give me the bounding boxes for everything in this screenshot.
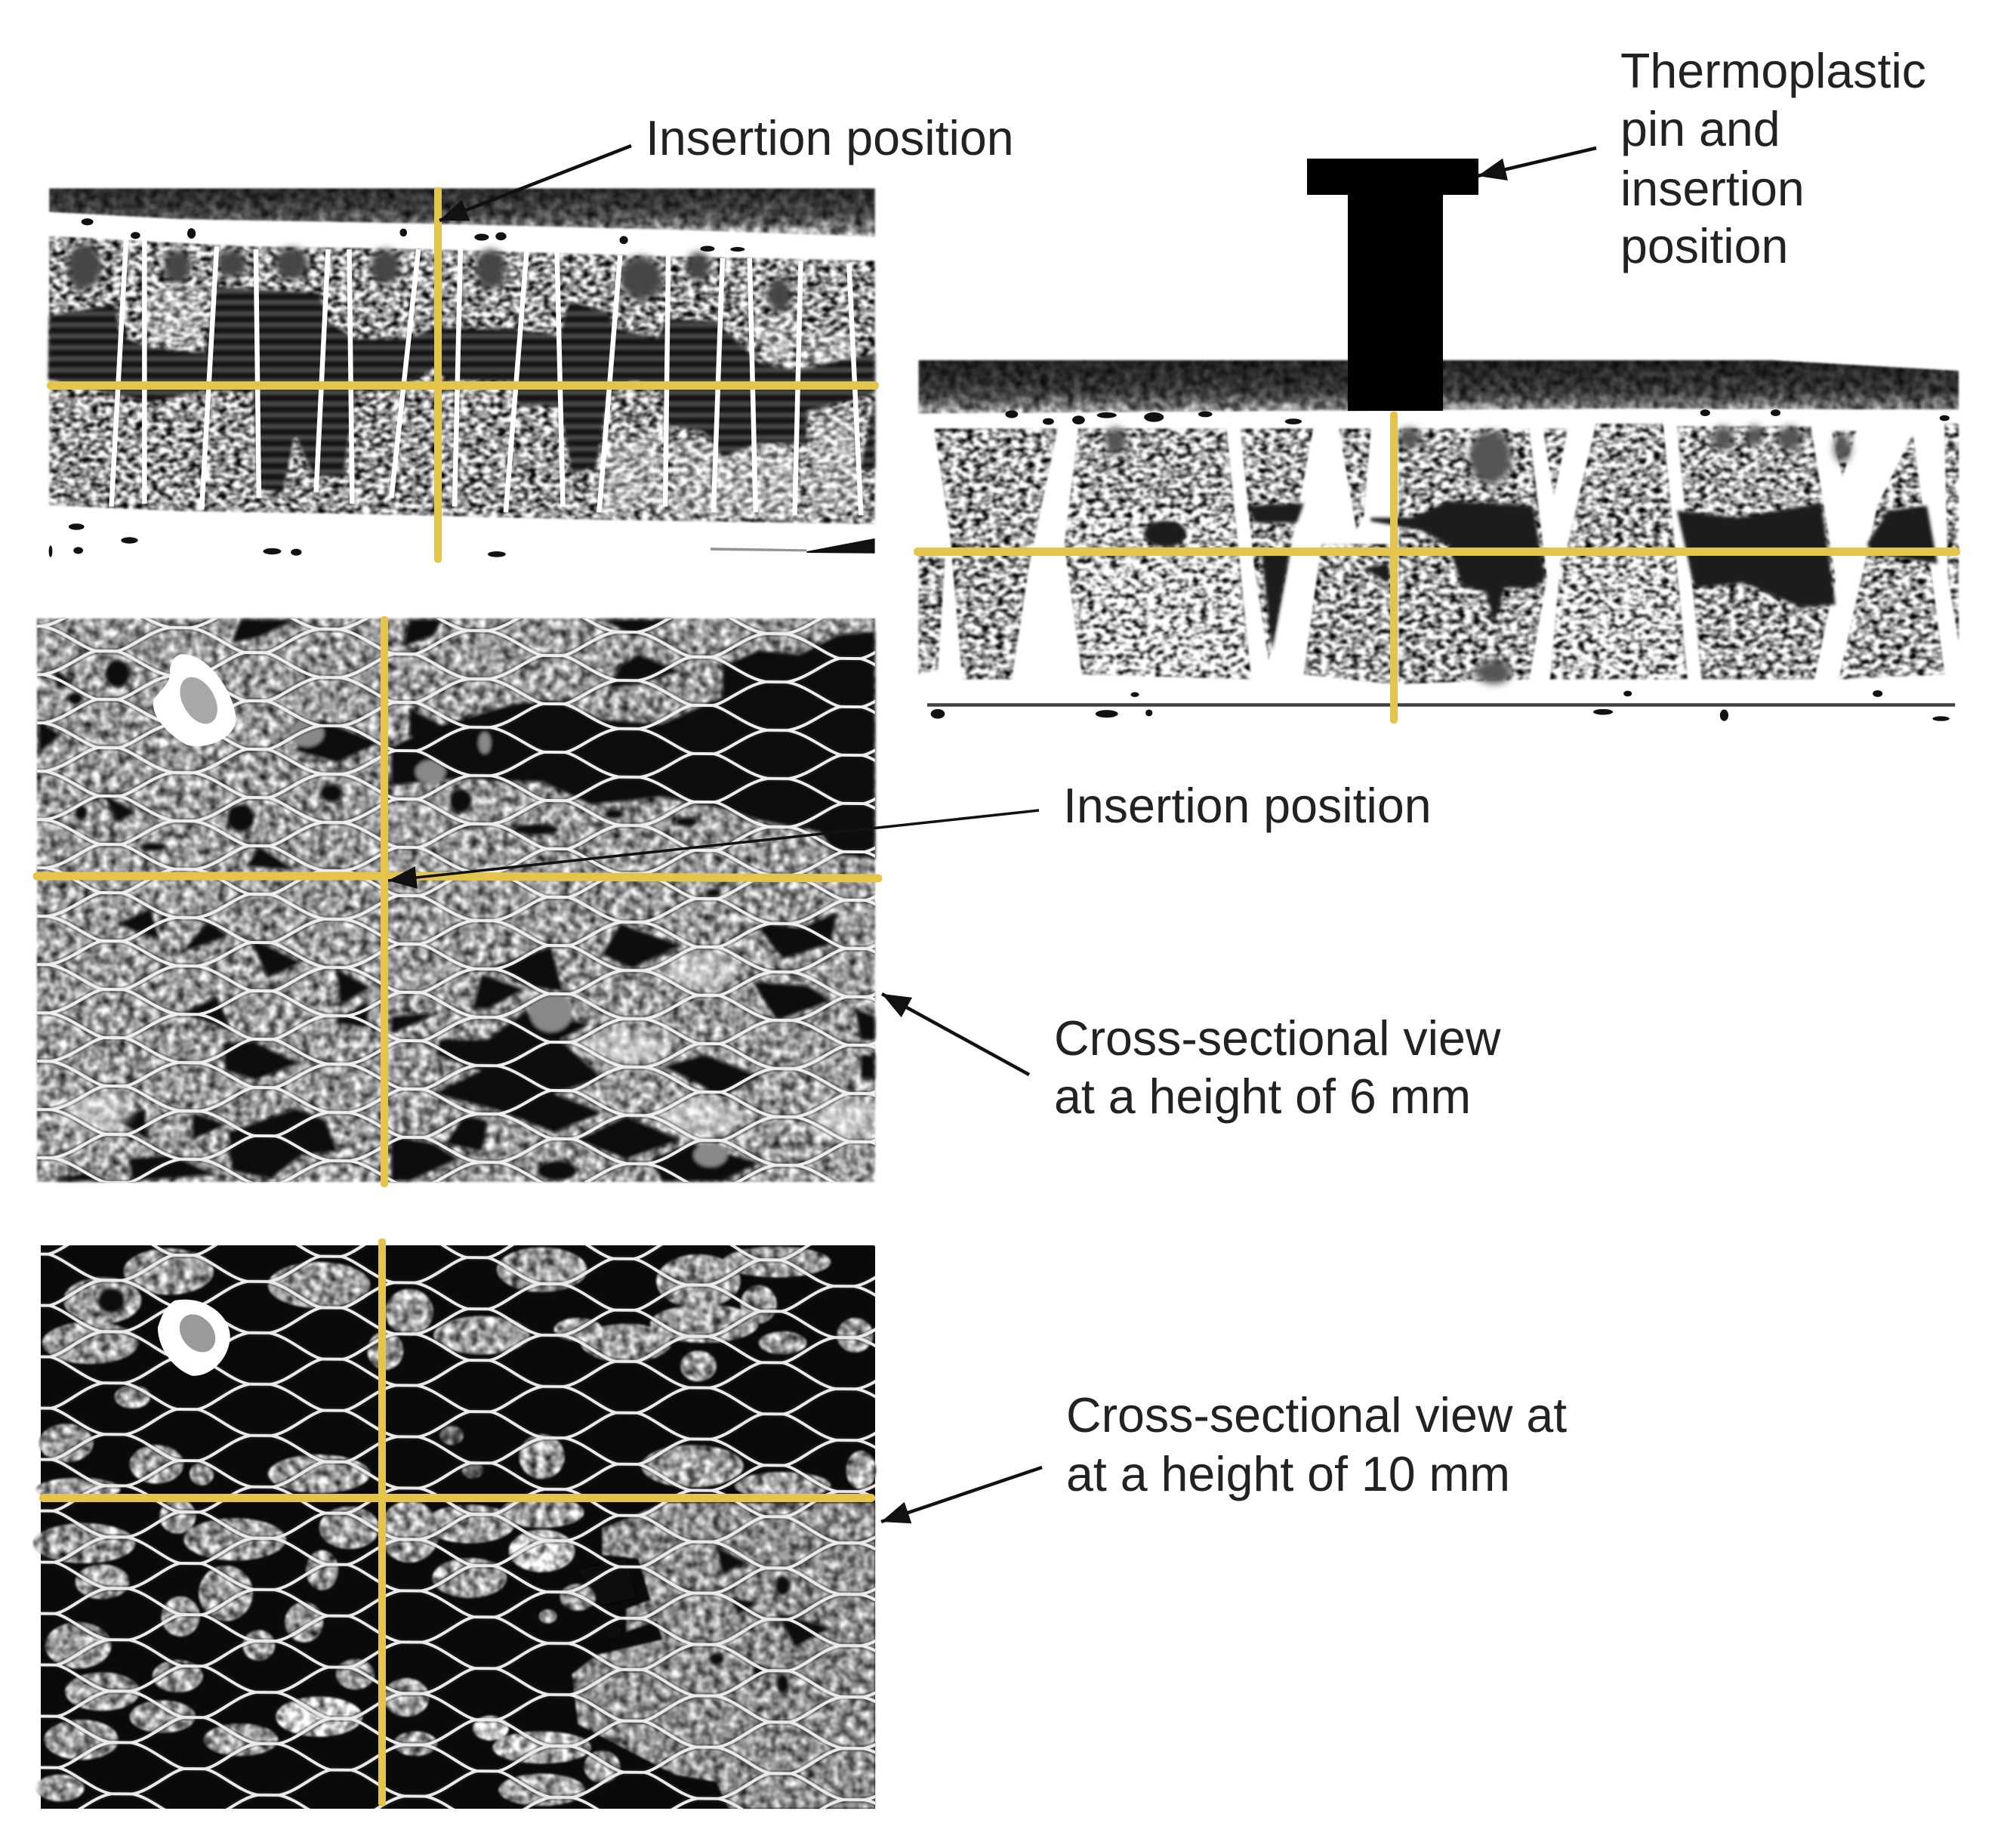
label: cross-sectional view at 10 mm: Cross-sectional view at [1066,1388,1567,1442]
horizontal section line [39,1494,875,1502]
icon: thermoplastic pin [1307,159,1478,411]
label: thermoplastic pin and insertion position [1620,44,1926,273]
label: insertion position middle: Insertion position [1063,779,1432,833]
label: thermoplastic pin and insertion position: Thermoplastic [1620,44,1926,98]
vertical insertion line [381,616,388,1187]
horizontal section line [37,876,878,878]
vertical insertion line [1390,412,1398,723]
label: thermoplastic pin and insertion position: position [1620,219,1788,273]
label: cross-sectional view at 6 mm: Cross-sectional view [1054,1011,1501,1066]
horizontal section line [47,381,879,390]
horizontal section line [914,548,1960,556]
vertical insertion line [378,1239,386,1806]
panel: longitudinal section with insertion position [47,187,879,563]
label: insertion position top: Insertion position [646,111,1014,165]
bright inclusion [158,1300,230,1376]
arrow: to 10 mm panel [881,1467,1042,1522]
bright inclusion [153,654,236,746]
panel: cross-section at height of 6 mm [37,616,878,1187]
label: thermoplastic pin and insertion position: insertion [1620,162,1805,216]
label: cross-sectional view at 10 mm: at a height of 10 mm [1066,1447,1510,1501]
label: cross-sectional view at 6 mm: at a height of 6 mm [1054,1069,1471,1124]
arrow: to pin [1478,148,1596,176]
vertical insertion line [434,187,442,563]
label: cross-sectional view at 10 mm [1066,1388,1567,1501]
arrow: to 6 mm panel [882,994,1029,1075]
honeycomb mesh [41,1245,875,1809]
honeycomb mesh [37,619,875,1182]
arrow: to cross-section insertion position [388,810,1039,881]
panel: pin inserted section [914,159,1960,723]
label: thermoplastic pin and insertion position: pin and [1620,102,1780,156]
panel: cross-section at height of 10 mm [33,1239,876,1809]
label: cross-sectional view at 6 mm [1054,1011,1501,1124]
arrow: to top insertion position [439,146,631,221]
